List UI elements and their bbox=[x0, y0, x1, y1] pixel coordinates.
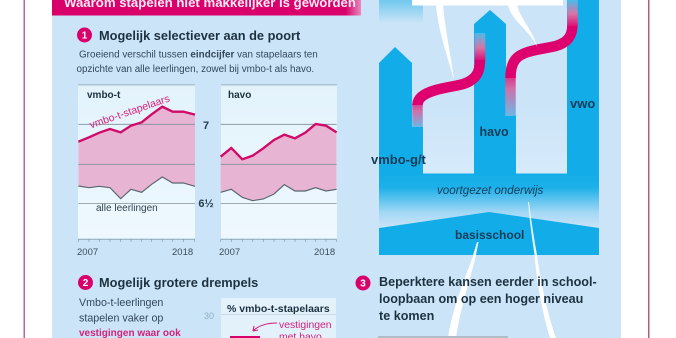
text block: section 1 intro: opzichte van alle leerlingen, zowel bij vmbo-t als havo. bbox=[76, 64, 314, 75]
arrow: vmbo-g/t bbox=[379, 47, 423, 175]
bar: vestigingen met havo bbox=[230, 336, 260, 338]
connector: white lines to lower box bbox=[448, 255, 556, 338]
axis value: 30: 30 bbox=[204, 311, 214, 321]
heading: section 2: 2 bbox=[83, 278, 89, 289]
banner heading bbox=[52, 0, 361, 16]
base: basisschool bbox=[379, 212, 599, 255]
white line in base bbox=[528, 202, 537, 255]
line chart: vmbo-t bbox=[77, 84, 195, 258]
heading: section 3: loopbaan om op een hoger niveau bbox=[379, 292, 583, 306]
label: voortgezet onderwijs: voortgezet onderwijs bbox=[437, 184, 544, 197]
callout tail: top right bbox=[508, 5, 537, 47]
axis label: 2018: 2018 bbox=[172, 247, 193, 258]
text block: section 1 intro: Groeiend verschil tussen eindcijfer van stapelaars ten bbox=[79, 50, 318, 60]
lower box top edge bbox=[378, 336, 508, 338]
bar label: vestigingen bbox=[279, 320, 332, 331]
axis label: 2018: 2018 bbox=[314, 247, 335, 258]
axis value: 6 1/2: 6½ bbox=[198, 198, 214, 210]
gaps between arrows bbox=[423, 100, 474, 174]
heading: section 3 bbox=[356, 275, 597, 323]
top box fade bbox=[379, 0, 423, 23]
label: havo: havo bbox=[480, 125, 509, 139]
page margin rule right bbox=[648, 0, 650, 338]
axis label: 2007: 2007 bbox=[77, 247, 98, 258]
arrow: label to bar bbox=[253, 323, 277, 331]
heading: section 3: 3 bbox=[360, 278, 366, 290]
arrow: havo bbox=[474, 10, 516, 175]
base: voortgezet onderwijs bbox=[379, 174, 599, 228]
line chart: havo bbox=[219, 84, 337, 258]
label: vwo: vwo bbox=[570, 96, 595, 111]
white line from basisschool bbox=[473, 242, 478, 255]
page margin rule left bbox=[24, 0, 25, 338]
diagram: school tracks bbox=[371, 0, 599, 255]
callout tail: top left bbox=[436, 5, 454, 80]
chart: % vmbo-t-stapelaars bbox=[221, 298, 336, 338]
axis label: 2007: 2007 bbox=[219, 247, 240, 258]
callout box bbox=[412, 0, 563, 6]
chart label: vmbo-t: vmbo-t bbox=[87, 90, 121, 101]
text block: section 2: Vmbo-t-leerlingen bbox=[79, 297, 163, 309]
chart title: % vmbo-t-stapelaars bbox=[227, 303, 330, 315]
series label: vmbo-t-stapelaars: vmbo-t-stapelaars bbox=[88, 93, 171, 131]
heading: section 3: te komen bbox=[379, 309, 434, 323]
heading: section 2: Mogelijk grotere drempels bbox=[99, 275, 258, 290]
text block: section 2: stapelen vaker op bbox=[79, 312, 163, 324]
heading: section 1: Mogelijk selectiever aan de poort bbox=[99, 28, 301, 43]
axis value: 7: 7 bbox=[203, 120, 209, 132]
label: vmbo-g/t: vmbo-g/t bbox=[371, 152, 427, 167]
stream: vmbo to havo bbox=[418, 33, 480, 127]
heading: section 3: Beperktere kansen eerder in school- bbox=[379, 275, 597, 289]
chart label: havo: havo bbox=[228, 90, 251, 101]
heading: section 1: 1 bbox=[82, 30, 88, 42]
label: basisschool: basisschool bbox=[455, 228, 524, 242]
series label: alle leerlingen: alle leerlingen bbox=[96, 203, 158, 214]
stream: havo to vwo bbox=[510, 0, 572, 116]
arrow: vwo bbox=[567, 0, 599, 175]
